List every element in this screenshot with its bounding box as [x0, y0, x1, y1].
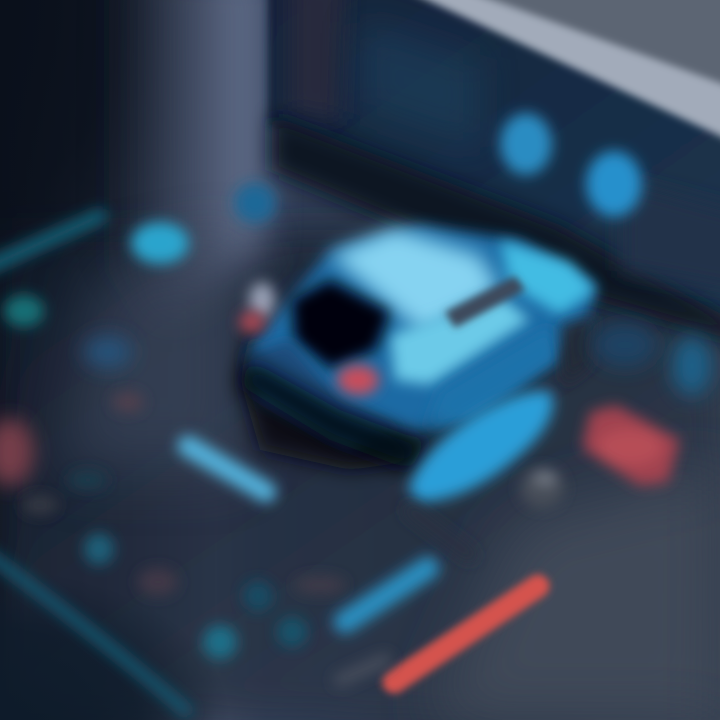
icon: faint dark dash: [410, 510, 470, 555]
icon: pale blue bar: [188, 446, 266, 492]
car rear lower: [245, 340, 400, 445]
icon: small grey block: [520, 468, 564, 508]
icon: teal square left: [4, 295, 44, 327]
car shadow: [240, 330, 420, 470]
icon: blue lower bar: [345, 568, 428, 622]
car black window: [292, 280, 390, 368]
icon: faint blue dot: [84, 336, 132, 368]
icon: blue glow under right wall: [593, 323, 657, 367]
icon: red left edge: [0, 418, 34, 486]
car dark side window: [445, 276, 525, 328]
car red tail light: [337, 365, 379, 395]
icon: wall glow left: [500, 113, 552, 175]
icon: right blue glow: [672, 336, 712, 396]
icon: faint red mark: [112, 392, 144, 412]
car bonnet: [500, 240, 596, 315]
car side light panel: [390, 295, 530, 385]
car red small light: [239, 311, 265, 333]
icon: upper left teal bar: [0, 216, 100, 266]
icon: large blue leaf: [408, 391, 553, 502]
car rear pale panel: [249, 282, 275, 318]
icon: bottom left teal arc: [0, 548, 190, 714]
car body: [248, 225, 596, 435]
icon: blue glow near pillar: [234, 183, 276, 223]
icon: faint marks lower left: [22, 470, 178, 596]
icon: teal dots bottom: [203, 576, 346, 659]
panel: top right grey slab: [410, 0, 720, 150]
icon: grey dash near red bar: [340, 660, 385, 680]
icon: wall glow right: [586, 151, 642, 217]
car front dark wheel: [560, 315, 595, 385]
panel: rear dashboard wall: [268, 0, 720, 345]
car lower door: [425, 325, 560, 430]
car underside shadow: [240, 360, 440, 470]
illustration: car: [239, 225, 596, 470]
icon: cyan glowing pill: [131, 222, 189, 264]
icon: red rounded block: [582, 405, 680, 486]
car roof highlight: [330, 228, 500, 335]
icon: red lower bar: [394, 586, 538, 682]
